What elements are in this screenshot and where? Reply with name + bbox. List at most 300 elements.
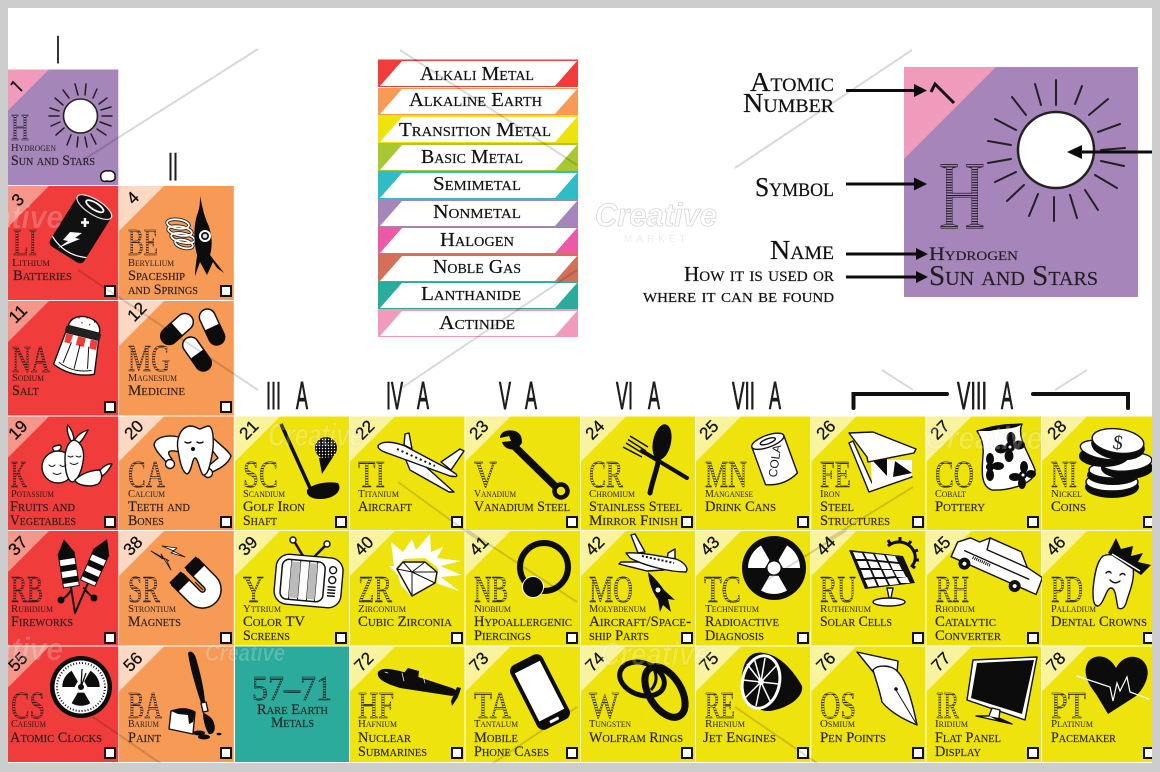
legend row: Lanthanide — [378, 282, 578, 309]
legend row: Transition Metal: Transition Metal — [399, 119, 551, 141]
use: Cubic Zirconia — [358, 614, 452, 630]
checkbox — [567, 748, 577, 758]
icon: spring — [166, 218, 196, 250]
name: Strontium — [128, 603, 176, 615]
icon: car — [948, 527, 1050, 601]
element: Hydrogen — [8, 70, 118, 185]
icon: radiation symbol — [742, 536, 806, 600]
use: Sun and Stars — [11, 153, 95, 169]
legend row: Noble Gas — [378, 254, 578, 282]
symbol: W — [589, 685, 619, 727]
atomic number: 44 — [813, 533, 839, 559]
use: Nuclear — [358, 730, 412, 746]
use: Aircraft/Space- — [589, 614, 691, 630]
symbol: TA — [474, 685, 511, 727]
element group: Rare Earth Metals 57-71 — [235, 646, 349, 762]
legend row: Alkaline Earth: Alkaline Earth — [409, 89, 542, 111]
legend: element categories — [378, 60, 578, 337]
name: Niobium — [474, 603, 511, 615]
use: Magnets — [128, 614, 181, 630]
use line 2: Diagnosis — [705, 628, 764, 644]
text: I — [56, 29, 60, 72]
icon: steel I-beam — [849, 432, 916, 492]
legend row: Noble Gas: Noble Gas — [433, 256, 521, 278]
symbol: BE — [128, 222, 158, 264]
name: Osmium — [820, 718, 855, 730]
name: Cobalt — [935, 488, 966, 500]
icon: jet engine — [736, 650, 802, 714]
use: Jet Engines — [703, 730, 776, 746]
label: Atomic Number — [743, 67, 834, 118]
checkbox — [1028, 633, 1038, 643]
legend row: Alkali Metal: Alkali Metal — [420, 63, 534, 85]
element: Ruthenium — [811, 531, 926, 646]
use: Drink Cans — [705, 499, 776, 515]
name: Calcium — [128, 488, 165, 500]
use: Pen Points — [820, 730, 886, 746]
name: Tantalum — [474, 718, 518, 730]
icon: atomic clock — [50, 656, 112, 718]
icon: sun — [49, 84, 112, 147]
legend row: Semimetal — [378, 171, 578, 199]
key panel: how to read a cell — [643, 67, 1152, 307]
symbol: RH — [936, 569, 969, 611]
checkbox — [336, 517, 346, 527]
label: Atomic Number: Atomic — [750, 67, 834, 97]
name: Rhodium — [935, 603, 975, 615]
use: Medicine — [128, 383, 185, 399]
key cell: element name: Hydrogen — [929, 244, 1019, 265]
text: A — [417, 375, 429, 418]
element: Strontium — [119, 531, 234, 646]
symbol: Y — [243, 569, 264, 611]
element: Beryllium — [119, 186, 234, 300]
atomic number: 46 — [1043, 533, 1069, 559]
atomic number: 4 — [123, 188, 143, 208]
checkbox — [1144, 517, 1154, 527]
checkbox — [452, 633, 462, 643]
atomic number: 27 — [927, 417, 953, 443]
use line 2: Vegetables — [10, 513, 76, 529]
symbol: V — [474, 454, 497, 496]
icon: capsules — [157, 306, 227, 374]
use: Color TV — [243, 614, 305, 630]
icon: smartphone — [508, 652, 572, 732]
icon: solar panel and sun — [849, 537, 919, 606]
use: Batteries — [13, 268, 72, 284]
checkbox — [798, 517, 808, 527]
checkbox — [221, 633, 231, 643]
use: Pottery — [935, 499, 985, 515]
use: Aircraft — [358, 499, 412, 515]
name: Ruthenium — [820, 603, 871, 615]
atomic number: 39 — [235, 533, 261, 559]
checkbox — [1144, 748, 1154, 758]
group header: V A — [499, 375, 537, 418]
use: Radioactive — [705, 614, 779, 630]
checkbox — [567, 517, 577, 527]
use line 2: Bones — [128, 513, 164, 529]
element: Tantalum — [466, 646, 580, 762]
legend row: Halogen: Halogen — [440, 229, 514, 251]
element: Chromium — [581, 416, 695, 530]
watermark: stock lines and marks: Creative — [600, 636, 710, 672]
name: Molybdenum — [589, 603, 646, 615]
icon: wrench — [500, 430, 568, 498]
checkbox — [682, 748, 692, 758]
checkbox — [105, 286, 115, 296]
symbol: ZR — [358, 569, 392, 611]
atomic number: 22 — [352, 417, 378, 443]
atomic number: 72 — [351, 649, 377, 675]
symbol: CA — [128, 454, 165, 496]
symbol: MN — [705, 454, 747, 496]
name: Vanadium — [474, 488, 516, 500]
icon: heart with pulse — [1077, 656, 1149, 714]
use: Atomic Clocks — [10, 730, 102, 746]
symbol: NB — [474, 569, 508, 611]
element: Zirconium — [350, 531, 464, 646]
watermark: stock lines and marks: Creative — [925, 420, 1043, 456]
use line 2: Phone Cases — [474, 744, 549, 760]
element: Scandium — [235, 416, 349, 530]
group header: III A: III — [266, 375, 281, 418]
atomic number: 43 — [697, 533, 723, 559]
element: Tungsten — [581, 646, 695, 762]
name: Technetium — [705, 603, 759, 615]
checkbox — [913, 633, 923, 643]
symbol: NI — [1051, 454, 1077, 496]
legend row: Halogen — [378, 227, 578, 254]
atomic number: 24 — [582, 417, 608, 443]
checkbox — [452, 517, 462, 527]
symbol: TC — [704, 569, 741, 611]
atomic number: 21 — [236, 417, 262, 443]
use: Paint — [128, 730, 161, 746]
legend row: Actinide — [378, 309, 578, 337]
legend row: Nonmetal — [378, 199, 578, 227]
atomic number: 26 — [813, 417, 839, 443]
atomic number: 11 — [5, 301, 31, 327]
name: Rhenium — [705, 718, 745, 730]
group header: V A: V — [499, 375, 511, 418]
atomic number: 77 — [928, 649, 954, 675]
use line 2: Mirror Finish — [589, 513, 678, 529]
element: Potassium — [5, 416, 118, 530]
atomic number: 12 — [124, 299, 150, 325]
element: Manganese — [696, 416, 810, 530]
use: Steel — [820, 499, 854, 515]
checkbox — [221, 286, 231, 296]
atomic number: 55 — [5, 649, 31, 675]
name: Caesium — [11, 718, 46, 730]
group header: VIII A with bracket — [854, 375, 1128, 418]
element: Rubidium — [5, 531, 118, 646]
use line 2: Structures — [820, 513, 890, 529]
text: A — [525, 375, 537, 418]
checkbox — [567, 633, 577, 643]
label: Atomic Number: Number — [743, 88, 834, 118]
symbol: LI — [13, 222, 37, 264]
symbol: RU — [820, 569, 856, 611]
symbol: SC — [243, 454, 278, 496]
symbol: OS — [820, 685, 856, 727]
symbol: CO — [935, 454, 974, 496]
use: Hypoallergenic — [474, 614, 572, 630]
legend row: Alkali Metal — [378, 60, 578, 87]
element: Yttrium — [235, 531, 349, 646]
name: Palladium — [1051, 603, 1096, 615]
symbol: TI — [358, 454, 385, 496]
icon: battery — [48, 190, 115, 265]
icon: stack of coins: $ — [1111, 431, 1124, 455]
icon: tooth with arms — [154, 426, 231, 478]
checkbox — [105, 402, 115, 412]
label: How it is used or where it can be found — [643, 262, 834, 307]
element: Vanadium — [466, 416, 580, 530]
legend row: Basic Metal — [378, 143, 578, 171]
checkbox — [798, 748, 808, 758]
symbol: NA — [12, 339, 50, 381]
atomic number: 25 — [696, 417, 722, 443]
element: Iron — [811, 416, 926, 530]
legend row: Nonmetal: Nonmetal — [433, 201, 521, 223]
element: Molybdenum — [581, 531, 695, 646]
icon: television — [273, 537, 344, 609]
use: Dental Crowns — [1051, 614, 1147, 630]
icon: tooth with crown — [1093, 538, 1151, 609]
atomic number: 20 — [121, 417, 147, 443]
name: Yttrium — [243, 603, 281, 615]
name: Tungsten — [589, 718, 631, 730]
legend row: Transition Metal — [378, 115, 578, 143]
symbol: CR — [589, 454, 623, 496]
group header: VIII A with bracket: A — [1001, 375, 1013, 418]
element: Sodium — [5, 301, 118, 416]
name: Potassium — [11, 488, 54, 500]
symbol: HF — [358, 685, 394, 727]
use: Catalytic — [935, 614, 996, 630]
atomic number: 74 — [582, 649, 608, 675]
symbol: PT — [1051, 685, 1086, 727]
name: Magnesium — [128, 372, 177, 384]
icon: fountain pen nib — [857, 652, 917, 725]
name: Zirconium — [358, 603, 406, 615]
element: Palladium — [1042, 531, 1154, 646]
atomic number: 75 — [696, 649, 722, 675]
use: Fireworks — [11, 614, 73, 630]
checkbox — [913, 748, 923, 758]
element: Calcium — [119, 416, 234, 530]
atomic number: 28 — [1044, 417, 1070, 443]
symbol: SR — [128, 569, 160, 611]
checkbox — [105, 517, 115, 527]
use: Wolfram Rings — [589, 730, 683, 746]
icon: fruits and vegetables — [42, 425, 112, 486]
use line 2: Piercings — [474, 628, 531, 644]
name: Beryllium — [128, 257, 174, 269]
atomic number: 73 — [466, 649, 492, 675]
arrow: atomic number — [846, 84, 927, 97]
element: Niobium — [466, 531, 580, 646]
checkbox — [682, 633, 692, 643]
key cell: symbol: H — [939, 142, 985, 250]
atomic number: 37 — [5, 533, 31, 559]
watermark: stock lines and marks: Creative — [205, 640, 285, 667]
name: Manganese — [705, 488, 753, 500]
use line 2: and Springs — [128, 282, 198, 298]
atomic number: 45 — [928, 533, 954, 559]
element: Barium — [119, 646, 234, 762]
use: Coins — [1051, 499, 1086, 515]
checkbox — [221, 402, 231, 412]
label: How it is used or where it can be found: How it is used or — [684, 262, 834, 286]
checkbox — [913, 517, 923, 527]
icon: flower vase — [977, 424, 1036, 490]
group header: IV A: IV — [386, 375, 403, 418]
icon: paint brush and can — [169, 652, 222, 740]
label: Symbol: Symbol — [755, 172, 834, 202]
element: Magnesium — [119, 299, 234, 416]
atomic number: 41 — [466, 533, 492, 559]
group header: VI A: VI — [616, 375, 633, 418]
arrow: symbol — [846, 178, 927, 190]
icon: diamond with sparkle — [381, 534, 462, 599]
element: Platinum — [1042, 646, 1154, 762]
use: Spaceship — [128, 268, 185, 284]
symbol: PD — [1051, 569, 1083, 611]
icon: fireworks rockets — [55, 536, 115, 613]
key cell background — [904, 67, 1138, 297]
use line 2: Converter — [935, 628, 1002, 644]
text: A — [296, 375, 308, 418]
legend row: Semimetal: Semimetal — [433, 173, 521, 195]
legend row: Basic Metal: Basic Metal — [421, 146, 523, 168]
atomic number: 19 — [5, 417, 31, 443]
legend row: Actinide: Actinide — [439, 312, 515, 334]
icon: flat panel monitor — [967, 657, 1037, 724]
name: Platinum — [1051, 718, 1093, 730]
use: Mobile — [474, 730, 518, 746]
symbol: BA — [128, 685, 162, 727]
checkbox — [336, 633, 346, 643]
arrow: sun pointer — [1067, 145, 1152, 159]
label: Metals: Metals — [271, 715, 314, 731]
use line 2: Display — [935, 744, 981, 760]
atomic number: 40 — [351, 533, 377, 559]
element: Titanium — [350, 416, 464, 530]
watermark: stock lines and marks: Creative — [268, 417, 363, 453]
checkbox — [682, 517, 692, 527]
symbol: RB — [11, 569, 43, 611]
element: Osmium — [811, 646, 926, 762]
atomic number: 78 — [1043, 649, 1069, 675]
name: Chromium — [589, 488, 635, 500]
name: Lithium — [12, 257, 50, 269]
use line 2: Shaft — [243, 513, 277, 529]
checkbox — [798, 633, 808, 643]
key cell: atomic number — [931, 84, 954, 103]
atomic number: 3 — [8, 190, 28, 210]
use line 2: Screens — [243, 628, 290, 644]
use: Stainless Steel — [589, 499, 682, 515]
checkbox — [105, 748, 115, 758]
label: Name: Name — [770, 235, 834, 265]
atomic number: 56 — [120, 649, 146, 675]
element: Hafnium — [350, 646, 464, 762]
atomic number: 42 — [582, 533, 608, 559]
use: Golf Iron — [243, 499, 305, 515]
label: How it is used or where it can be found: where it can be found — [643, 285, 834, 307]
name: Hydrogen — [11, 142, 56, 154]
checkbox — [452, 748, 462, 758]
key cell: use: Sun and Stars — [929, 260, 1098, 292]
atomic number: 23 — [466, 417, 492, 443]
icon: horseshoe magnet — [151, 546, 213, 600]
legend row: Alkaline Earth — [378, 88, 578, 115]
checkbox — [1028, 748, 1038, 758]
use: Teeth and — [128, 499, 190, 515]
text: A — [769, 375, 781, 418]
symbol H: H — [11, 107, 29, 149]
use line 2: Submarines — [358, 744, 427, 760]
use: Salt — [12, 383, 39, 399]
checkbox — [221, 517, 231, 527]
use: Flat Panel — [935, 730, 1001, 746]
icon: wedding rings — [615, 656, 693, 724]
symbol: FE — [820, 454, 851, 496]
text: A — [648, 375, 660, 418]
element: Caesium — [5, 646, 118, 762]
text: II — [168, 146, 178, 189]
icon: cola can: COLA — [766, 444, 784, 478]
use line 2: ship Parts — [589, 628, 649, 644]
name: Barium — [128, 718, 159, 730]
atomic number range: 57–71 — [252, 669, 332, 708]
icon: large sun — [988, 80, 1125, 221]
group header: VIII A with bracket: VIII — [957, 375, 987, 418]
icon: golf club and ball — [281, 424, 339, 499]
arrow: use — [846, 271, 928, 283]
element: Technetium — [696, 531, 810, 646]
use: Pacemaker — [1051, 730, 1117, 746]
atomic number: 38 — [120, 533, 146, 559]
element: Iridium — [926, 646, 1041, 762]
name: Iridium — [935, 718, 968, 730]
watermark: stock lines and marks: MARKET — [624, 234, 690, 245]
name: Hafnium — [358, 718, 397, 730]
name: Iron — [820, 488, 840, 500]
atomic number: 76 — [813, 649, 839, 675]
symbol: MG — [128, 338, 170, 380]
checkbox — [1028, 517, 1038, 527]
icon: submarine — [378, 668, 461, 706]
group header: VII A: VII — [732, 375, 755, 418]
name: Nickel — [1051, 488, 1082, 500]
element: Cobalt — [926, 416, 1041, 530]
symbol: RE — [705, 685, 735, 727]
name: Sodium — [12, 372, 44, 384]
element: Lithium — [8, 186, 118, 300]
icon: fork and spoon — [623, 423, 687, 493]
name: Scandium — [243, 488, 285, 500]
icon: ring piercing — [520, 543, 568, 598]
use: Vanadium Steel — [474, 499, 570, 515]
element: Rhodium — [926, 527, 1050, 646]
icon: rocket — [194, 196, 224, 276]
use: Fruits and — [10, 499, 75, 515]
checkbox — [1144, 633, 1154, 643]
